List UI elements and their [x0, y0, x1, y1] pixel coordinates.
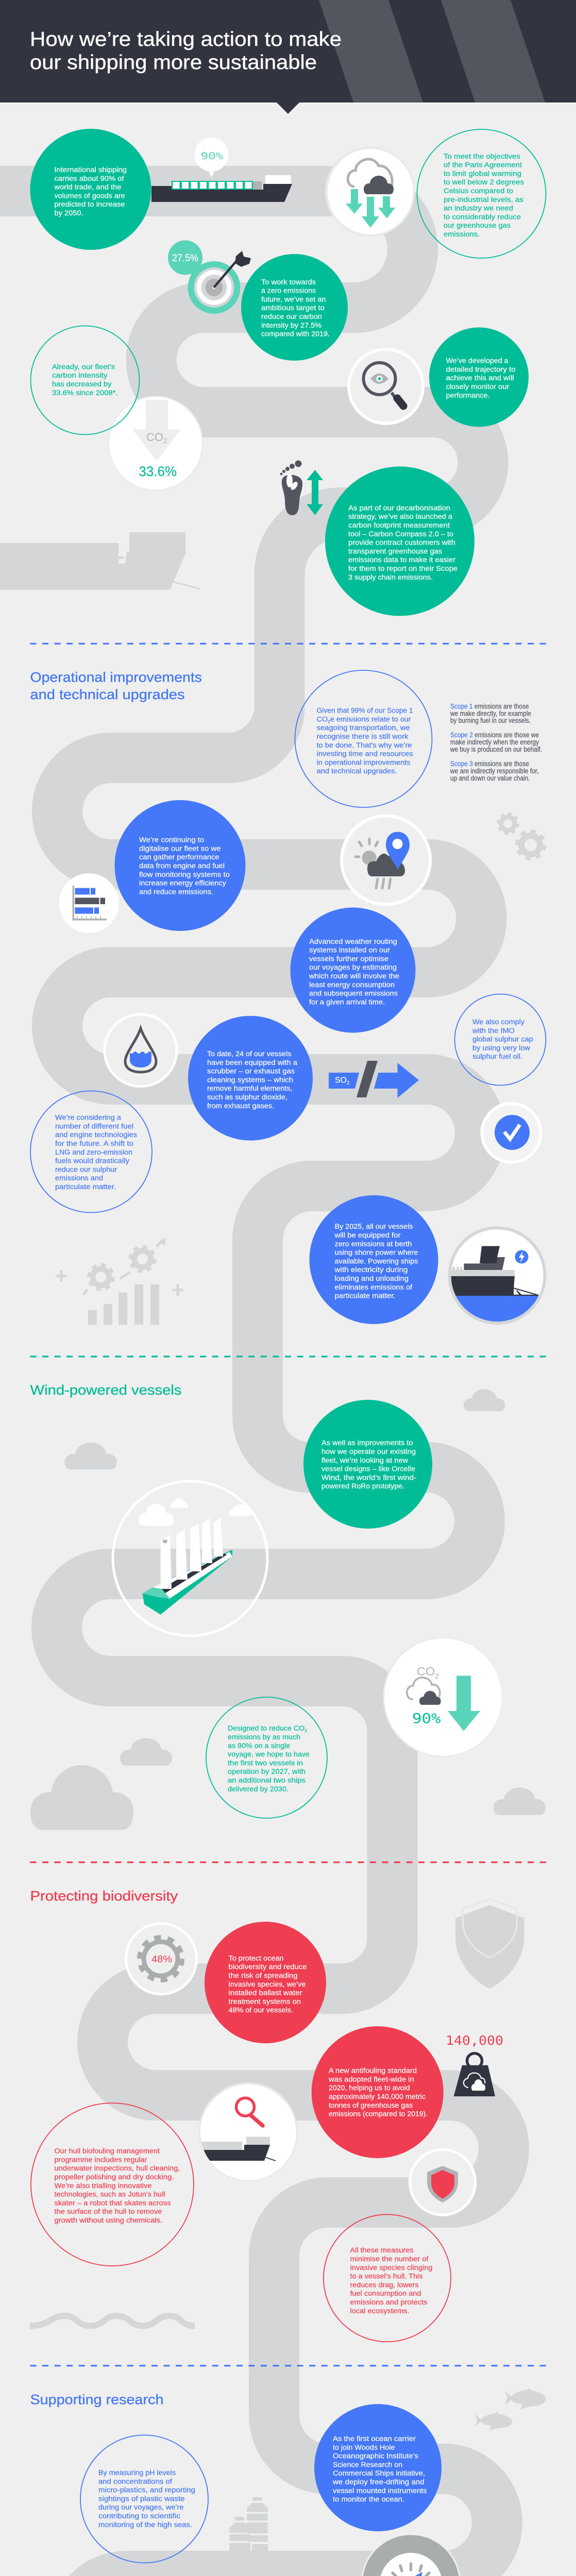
panel: detailed trajectory: achieve this and will: [446, 374, 514, 382]
panel: detailed trajectory: performance.: [446, 392, 490, 399]
icon: target with 27.5% bubble: [168, 240, 251, 314]
panel: hull biofouling: propeller polishing and dry docking.: [55, 2173, 174, 2181]
panel: pH and micro-plastics: and concentrations of: [98, 2478, 172, 2485]
icon: CO2 down arrow 33.6%: CO: [146, 431, 163, 444]
panel: antifouling standard: approximately 140,000 metric: [329, 2093, 426, 2100]
panel: weather routing systems: [291, 908, 415, 1032]
panel: invasive species: All these measures: [350, 2246, 414, 2254]
panel: zero emissions target: future, we’ve set an: [261, 295, 326, 303]
panel: Woods Hole: Commercial Ships initiative,: [333, 2469, 425, 2477]
icon: CO2 cloud 90%: 90%: [412, 1711, 441, 1727]
text block: scope definitions: by burning fuel in our vessels.: [450, 717, 531, 724]
text block: scope definitions: we are indirectly responsible for,: [450, 767, 539, 775]
icon: background plastic bottles: [230, 2497, 268, 2551]
panel: Scope 1 emissions callout: 2: [328, 719, 330, 724]
panel: weather routing systems: least energy consumption: [309, 981, 395, 989]
panel: Woods Hole: Science Research on: [333, 2461, 402, 2468]
panel: carbon footprint measurement tool: emissions data to make it easier: [348, 556, 456, 564]
heading: operational improvements: Operational improvements: [30, 670, 202, 685]
panel: Woods Hole: vessel mounted instruments: [333, 2487, 427, 2495]
panel: new vessel designs: vessel designs – like Orcelle: [321, 1465, 415, 1473]
panel: IMO sulphur cap: [454, 994, 546, 1085]
panel: pH and micro-plastics: micro-plastics, and reporting: [98, 2486, 195, 2494]
panel: Orcelle CO2 reduction: voyage, we hope to have: [228, 1751, 310, 1758]
panel: Paris Agreement objectives: of the Paris Agreement: [444, 161, 522, 169]
panel: Paris Agreement objectives: our greenhouse gas: [444, 222, 511, 229]
icon: bar chart: [59, 873, 118, 933]
panel: Paris Agreement objectives: [417, 129, 546, 258]
icon: cargo ship with 90% bubble: 90%: [201, 150, 224, 162]
icon: SO2 filtered arrow: 2: [347, 1080, 349, 1085]
panel: shore power: particulate matter.: [335, 1292, 396, 1300]
icon: CO2 cloud 90%: CO: [417, 1665, 435, 1678]
panel: antifouling standard: [312, 2026, 444, 2158]
panel: Orcelle CO2 reduction: 2: [304, 1728, 308, 1733]
heading: operational improvements: and technical upgrades: [30, 687, 184, 702]
panel: digitalise fleet: can gather performance: [139, 853, 219, 861]
title: [30, 28, 342, 74]
panel: scrubbers: such as sulphur dioxide,: [207, 1093, 287, 1101]
panel: Scope 1 emissions callout: and technical upgrades.: [317, 767, 397, 775]
panel: shore power: will be equipped for: [334, 1231, 401, 1239]
text block: scope definitions: we buy is produced on our behalf.: [450, 745, 542, 753]
panel: shore power: with electricity during: [334, 1266, 408, 1274]
panel: scrubbers: cleaning systems – which: [207, 1076, 293, 1083]
icon: background growth chart and gears: [56, 1237, 183, 1325]
panel: carbon footprint measurement tool: [325, 467, 475, 616]
panel: pH and micro-plastics: monitoring of the high seas.: [98, 2521, 192, 2529]
panel: international shipping: world trade, and the: [54, 183, 122, 191]
panel: Orcelle CO2 reduction: Designed to reduce CO: [228, 1724, 300, 1732]
panel: antifouling standard: emissions (compared to 2019).: [329, 2110, 428, 2118]
panel: detailed trajectory: We’ve developed a: [446, 357, 509, 365]
panel: carbon footprint measurement tool: transparent greenhouse gas: [348, 547, 442, 555]
panel: invasive species: fuel consumption and: [350, 2290, 421, 2297]
icon: CO2 down arrow 33.6%: 33.6%: [139, 464, 177, 479]
panel: ballast water: 48% of our vessels.: [229, 2006, 293, 2014]
panel: ballast water: [205, 1922, 326, 2043]
panel: antifouling standard: 2020, helping us to avoid: [329, 2084, 410, 2092]
panel: Woods Hole: Oceanographic Institute’s: [333, 2452, 418, 2460]
panel: zero emissions target: [241, 254, 348, 361]
panel: pH and micro-plastics: contributing to scientific: [98, 2512, 180, 2520]
icon: gear 48%: 48%: [151, 1954, 172, 1965]
icon: CO2 down arrow 33.6%: 2: [163, 436, 167, 445]
icon: background clouds: [65, 1389, 505, 1469]
icon: gear 48%: [126, 1924, 197, 1994]
title: our shipping more sustainable: [30, 52, 317, 74]
panel: hull biofouling: skater – a robot that skates across: [55, 2199, 171, 2207]
heading: protecting biodiversity: Protecting biodiversity: [30, 1888, 178, 1904]
panel: antifouling standard: A new antifouling standard: [329, 2067, 417, 2075]
heading: wind-powered vessels: Wind-powered vessels: [30, 1382, 181, 1398]
panel: carbon intensity decrease: carbon intensity: [52, 371, 108, 379]
panel: weather routing systems: and subsequent emissions: [309, 990, 398, 997]
icon: SO2 filtered arrow: [329, 1061, 419, 1098]
panel: carbon intensity decrease: [31, 326, 139, 435]
panel: shore power: zero emissions at berth: [335, 1240, 412, 1248]
text block: scope definitions: we make directly, for example: [450, 709, 531, 717]
panel: invasive species: minimise the number of: [350, 2255, 429, 2263]
panel: hull biofouling: We’re also trialling innovative: [55, 2182, 151, 2190]
panel: invasive species: emissions and protects: [350, 2298, 428, 2306]
panel: hull biofouling: programme includes regular: [55, 2156, 147, 2163]
panel: Orcelle CO2 reduction: [206, 1697, 327, 1818]
panel: digitalise fleet: digitalise our fleet so we: [139, 844, 221, 852]
panel: IMO sulphur cap: with the IMO: [472, 1027, 515, 1035]
background ship silhouette: [0, 532, 200, 590]
text block: scope definitions: Scope 2 emissions are those we: [450, 731, 539, 739]
panel: Orcelle CO2 reduction: as 90% on a single: [228, 1742, 290, 1750]
panel: scrubbers: from exhaust gases.: [207, 1102, 274, 1110]
panel: invasive species: reduces drag, lowers: [350, 2281, 419, 2289]
text block: scope definitions: up and down our value chain.: [450, 774, 530, 782]
icon: SO2 filtered arrow: SO: [335, 1076, 347, 1084]
panel: future fuel technologies: for the future. A shift to: [55, 1140, 133, 1147]
header banner: [0, 0, 576, 114]
text block: scope definitions: Scope 1 emissions are those: [450, 702, 529, 710]
panel: shore power: using shore power where: [335, 1249, 418, 1257]
panel: invasive species: to a vessel’s hull. This: [350, 2273, 423, 2280]
panel: international shipping: by 2050.: [55, 209, 83, 217]
panel: new vessel designs: how we operate our existing: [321, 1448, 416, 1455]
panel: zero emissions target: compared with 2019.: [261, 330, 330, 338]
panel: Orcelle CO2 reduction: an additional two ships: [228, 1776, 306, 1784]
panel: international shipping: predicted to increase: [55, 200, 125, 208]
panel: weather routing systems: for a given arrival time.: [309, 998, 385, 1006]
icon: wind-powered ship: W: [163, 1539, 167, 1544]
panel: detailed trajectory: [429, 328, 529, 427]
panel: Paris Agreement objectives: an industry we need: [444, 205, 513, 212]
panel: pH and micro-plastics: sightings of plastic waste: [98, 2495, 185, 2502]
icon: weather routing pin: [342, 816, 430, 905]
panel: ballast water: biodiversity and reduce: [229, 1963, 307, 1971]
panel: Paris Agreement objectives: to limit global warming: [444, 170, 521, 177]
icon: water drop: [105, 1014, 177, 1087]
panel: future fuel technologies: [30, 1091, 152, 1213]
panel: digitalise fleet: We’re continuing to: [139, 836, 204, 844]
panel: hull biofouling: [31, 2103, 194, 2266]
panel: IMO sulphur cap: global sulphur cap: [472, 1036, 533, 1043]
panel: invasive species: [324, 2214, 451, 2342]
panel: scrubbers: remove harmful elements,: [207, 1084, 293, 1092]
panel: pH and micro-plastics: during our voyages, we’re: [98, 2503, 183, 2511]
text block: scope definitions: [450, 702, 542, 782]
panel: digitalise fleet: data from engine and fuel: [139, 862, 225, 870]
icon: background fish: [475, 2388, 546, 2431]
panel: hull biofouling: Our hull biofouling management: [55, 2147, 160, 2155]
panel: carbon footprint measurement tool: As part of our decarbonisation: [348, 504, 450, 512]
icon: weight 140,000 tonnes: 140,000: [446, 2033, 503, 2048]
panel: Woods Hole: to monitor the ocean.: [333, 2496, 404, 2503]
panel: Scope 1 emissions callout: seagoing transportation, we: [317, 724, 410, 732]
panel: digitalise fleet: flow monitoring systems to: [139, 871, 230, 878]
panel: scrubbers: scrubber – or exhaust gas: [207, 1067, 295, 1075]
panel: shore power: available. Powering ships: [335, 1257, 418, 1265]
panel: carbon intensity decrease: Already, our fleet’s: [52, 363, 115, 370]
icon: CO2 down arrow 33.6%: [108, 396, 203, 490]
panel: new vessel designs: powered RoRo prototype.: [321, 1482, 404, 1490]
divider: [30, 643, 546, 645]
panel: IMO sulphur cap: We also comply: [472, 1018, 524, 1026]
panel: weather routing systems: Advanced weather routing: [309, 938, 397, 945]
panel: Woods Hole: [314, 2404, 442, 2531]
panel: invasive species: invasive species clinging: [350, 2264, 433, 2272]
panel: hull biofouling: growth without using chemicals.: [55, 2216, 162, 2224]
panel: Paris Agreement objectives: emissions.: [444, 230, 480, 238]
divider: [30, 1861, 546, 1863]
panel: future fuel technologies: number of different fuel: [55, 1122, 133, 1130]
icon: target with 27.5% bubble: 27.5%: [172, 253, 198, 264]
panel: Paris Agreement objectives: Celsius compared to: [444, 187, 513, 195]
icon: ship at berth with electricity: [448, 1228, 546, 1327]
panel: digitalise fleet: increase energy efficiency: [139, 879, 226, 887]
panel: new vessel designs: As well as improvements to: [321, 1439, 413, 1447]
panel: shore power: By 2025, all our vessels: [335, 1223, 413, 1230]
text block: scope definitions: Scope 3 emissions are those: [450, 760, 529, 768]
panel: new vessel designs: fleet, we’re looking at new: [321, 1456, 408, 1464]
panel: ballast water: invasive species, we’ve: [229, 1980, 306, 1988]
panel: Orcelle CO2 reduction: emissions by as much: [228, 1733, 300, 1741]
icon: clouds with falling arrows: [325, 147, 415, 236]
panel: detailed trajectory: closely monitor our: [446, 383, 510, 391]
panel: shore power: eliminates emissions of: [335, 1283, 412, 1291]
icon: background clouds lower: [30, 1738, 546, 1830]
panel: weather routing systems: our voyages by estimating: [309, 963, 397, 971]
panel: zero emissions target: intensity by 27.5%: [261, 321, 321, 329]
panel: shore power: [309, 1195, 438, 1324]
panel: antifouling standard: was adopted fleet-wide in: [328, 2075, 414, 2083]
panel: invasive species: local ecosystems.: [350, 2307, 409, 2315]
panel: Paris Agreement objectives: pre-industrial levels, as: [444, 196, 523, 204]
icon: magnifier with eye: [349, 349, 423, 423]
panel: weather routing systems: which route will involve the: [309, 972, 399, 980]
panel: hull biofouling: underwater inspections, hull cleaning,: [55, 2164, 180, 2172]
panel: new vessel designs: [303, 1400, 432, 1529]
icon: shield: [410, 2149, 475, 2215]
panel: international shipping: International shipping: [55, 166, 127, 174]
panel: future fuel technologies: We’re considering a: [55, 1114, 122, 1122]
panel: Scope 1 emissions callout: in operational improvements: [317, 758, 411, 766]
heading: operational improvements: [30, 670, 202, 702]
divider: [30, 1355, 546, 1358]
icon: wind-powered ship: [113, 1481, 267, 1636]
panel: ballast water: To protect ocean: [229, 1954, 283, 1962]
panel: ballast water: treatment systems on: [229, 1997, 301, 2005]
panel: carbon intensity decrease: has decreased by: [52, 380, 112, 388]
panel: scrubbers: have been equipped with a: [207, 1059, 298, 1066]
panel: carbon intensity decrease: 33.6% since 2008*.: [52, 389, 118, 397]
panel: future fuel technologies: reduce our sulphur: [55, 1165, 117, 1173]
panel: carbon footprint measurement tool: 3 supply chain emissions.: [348, 573, 433, 581]
text block: scope definitions: make indirectly when the energy: [450, 738, 539, 746]
panel: Scope 1 emissions callout: [295, 670, 432, 807]
panel: weather routing systems: systems installed on our: [309, 946, 391, 954]
panel: hull biofouling: the surface of the hull to remove: [55, 2208, 162, 2215]
icon: check mark: [482, 1104, 541, 1162]
panel: international shipping: [30, 129, 151, 250]
panel: IMO sulphur cap: sulphur fuel oil.: [472, 1053, 522, 1060]
panel: zero emissions target: reduce our carbon: [261, 313, 322, 320]
panel: pH and micro-plastics: By measuring pH levels: [98, 2469, 176, 2477]
panel: hull biofouling: technologies, such as Jotun’s hull: [55, 2191, 165, 2198]
panel: future fuel technologies: and engine technologies: [55, 1131, 137, 1139]
icon: CO2 cloud 90%: [383, 1637, 502, 1757]
panel: future fuel technologies: particulate matter.: [55, 1183, 116, 1191]
panel: Paris Agreement objectives: to considerably reduce: [444, 213, 521, 221]
panel: Woods Hole: As the first ocean carrier: [333, 2435, 416, 2443]
panel: Scope 1 emissions callout: CO: [317, 715, 327, 723]
icon: speed gauge: [361, 2534, 461, 2576]
panel: zero emissions target: To work towards: [261, 278, 316, 286]
icon: background wave: [30, 2316, 195, 2326]
panel: pH and micro-plastics: [80, 2435, 208, 2563]
panel: weather routing systems: vessels further optimise: [309, 955, 388, 962]
panel: IMO sulphur cap: by using very low: [472, 1044, 530, 1052]
panel: Scope 1 emissions callout: Given that 99% of our Scope 1: [317, 707, 413, 715]
panel: future fuel technologies: emissions and: [55, 1174, 103, 1182]
icon: CO2 cloud 90%: 2: [435, 1672, 439, 1680]
panel: Woods Hole: we deploy free-drifting and: [332, 2478, 425, 2486]
panel: future fuel technologies: fuels would drastically: [55, 1157, 129, 1165]
panel: shore power: loading and unloading: [335, 1275, 409, 1282]
icon: background shield: [455, 1899, 524, 1989]
panel: future fuel technologies: LNG and zero-emission: [55, 1148, 132, 1156]
panel: carbon footprint measurement tool: provide contract customers with: [348, 539, 455, 547]
panel: zero emissions target: ambitious target to: [261, 304, 325, 312]
panel: Scope 1 emissions callout: investing time and resources: [317, 750, 413, 758]
panel: detailed trajectory: detailed trajectory to: [446, 365, 516, 373]
panel: scrubbers: To date, 24 of our vessels: [207, 1050, 292, 1058]
icon: cargo ship with 90% bubble: [151, 138, 292, 202]
panel: Paris Agreement objectives: To meet the objectives: [444, 152, 520, 160]
icon: carbon footprint: [280, 461, 323, 515]
icon: weight 140,000 tonnes: [446, 2033, 503, 2096]
icon: background gears: [498, 814, 544, 858]
panel: carbon footprint measurement tool: tool – Carbon Compass 2.0 – to: [348, 530, 453, 538]
panel: Orcelle CO2 reduction: delivered by 2030.: [228, 1785, 289, 1793]
panel: ballast water: installed ballast water: [229, 1989, 302, 1997]
panel: Scope 1 emissions callout: recognise there is still work: [317, 733, 409, 740]
panel: carbon footprint measurement tool: carbon footprint measurement: [348, 521, 450, 529]
panel: carbon footprint measurement tool: strategy, we’ve also launched a: [348, 513, 453, 520]
panel: international shipping: volumes of goods are: [55, 192, 125, 199]
panel: international shipping: carries about 90% of: [55, 175, 124, 182]
panel: Scope 1 emissions callout: e emissions relate to our: [330, 715, 411, 723]
panel: Paris Agreement objectives: to well below 2 degrees: [444, 178, 524, 186]
panel: antifouling standard: tonnes of greenhouse gas: [329, 2102, 413, 2109]
panel: scrubbers: [188, 1016, 313, 1141]
panel: Scope 1 emissions callout: to be done. That’s why we’re: [317, 741, 412, 749]
panel: Orcelle CO2 reduction: the first two vessels in: [228, 1759, 303, 1767]
icon: magnifier and hull: [199, 2082, 298, 2181]
title: How we’re taking action to make: [30, 28, 342, 50]
panel: digitalise fleet: [114, 800, 245, 931]
panel: zero emissions target: a zero emissions: [261, 287, 316, 295]
panel: Woods Hole: to join Woods Hole: [333, 2444, 395, 2451]
panel: ballast water: the risk of spreading: [229, 1972, 298, 1979]
panel: Orcelle CO2 reduction: operation by 2027, with: [228, 1768, 306, 1775]
divider: [30, 2365, 546, 2366]
panel: carbon footprint measurement tool: for them to report on their Scope: [348, 565, 458, 572]
panel: digitalise fleet: and reduce emissions.: [139, 888, 213, 895]
heading: supporting research: Supporting research: [30, 2392, 164, 2407]
panel: new vessel designs: Wind, the world’s first wind-: [321, 1473, 416, 1481]
